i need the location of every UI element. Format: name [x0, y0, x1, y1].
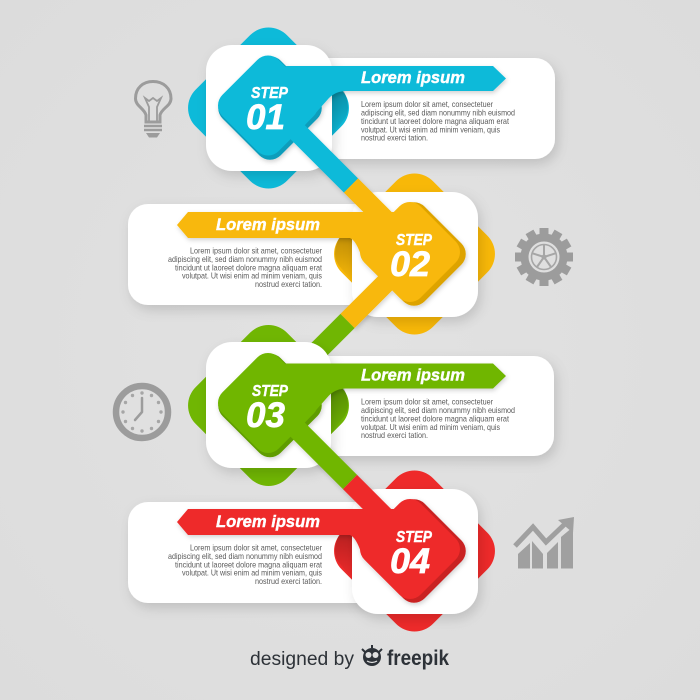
step 2 description: Lorem ipsum dolor sit amet, consectetuer	[190, 246, 322, 256]
step 1 title: Lorem ipsum	[361, 68, 465, 87]
step 2 description: adipiscing elit, sed diam nonummy nibh euismod	[168, 255, 322, 264]
step 3 description: Lorem ipsum dolor sit amet, consectetuer	[361, 398, 493, 406]
step 1 marker: diamond, arrow band and connector	[212, 49, 506, 186]
connector: green segment behind step 3	[298, 321, 348, 370]
footer credit	[250, 645, 449, 670]
step 2 title: Lorem ipsum	[216, 215, 320, 234]
icon: gear with wheel	[515, 228, 573, 286]
step 3 marker: diamond, arrow band and connector	[212, 347, 506, 482]
step 4 description: tincidunt ut laoreet dolore magna aliquam erat	[175, 560, 323, 569]
step 3 description: nostrud exerci tation.	[361, 431, 428, 440]
step 3 base: panel and plates	[177, 314, 554, 497]
step 4 base: panel and plates	[128, 460, 506, 642]
step 1 description: adipiscing elit, sed diam nonummy nibh euismod	[361, 108, 515, 117]
step 3 description: tincidunt ut laoreet dolore magna aliquam erat	[361, 414, 510, 423]
step 2 base: panel and plates	[128, 163, 506, 345]
step 1 base: panel and plates	[177, 17, 555, 199]
step 1 description: tincidunt ut laoreet dolore magna aliquam erat	[361, 117, 510, 126]
step 1 description: Lorem ipsum dolor sit amet, consectetuer	[361, 100, 493, 109]
step 1 description: nostrud exerci tation.	[361, 134, 428, 143]
step 4 description: adipiscing elit, sed diam nonummy nibh euismod	[168, 552, 322, 561]
step 4 description: Lorem ipsum dolor sit amet, consectetuer	[190, 544, 322, 552]
step 1 number: 01	[246, 98, 285, 137]
step 4 title: Lorem ipsum	[216, 512, 320, 531]
step 1 description	[361, 100, 515, 143]
step 2 label: STEP	[396, 232, 432, 249]
step 3 number: 03	[246, 396, 286, 435]
step 2 marker: diamond, arrow band and connectors	[177, 186, 472, 321]
icon: growth chart	[515, 517, 574, 568]
step 4 description: volutpat. Ut wisi enim ad minim veniam, quis	[182, 569, 322, 578]
step 4 label: STEP	[396, 529, 432, 546]
step 2 description	[168, 246, 323, 289]
step 2 description: tincidunt ut laoreet dolore magna aliquam erat	[175, 263, 323, 272]
step 2 description: nostrud exerci tation.	[255, 280, 322, 289]
footer credit: freepik	[387, 647, 449, 670]
footer credit: designed by	[250, 649, 355, 670]
step 1 label: STEP	[251, 85, 288, 102]
step 4 description: nostrud exerci tation.	[255, 577, 322, 586]
icon: clock	[116, 386, 168, 438]
step 4 description	[168, 544, 323, 586]
step 3 description: adipiscing elit, sed diam nonummy nibh euismod	[361, 406, 515, 415]
step 4 number: 04	[390, 542, 430, 581]
step 4 marker: diamond, arrow band and connector	[177, 482, 472, 609]
step 2 description: volutpat. Ut wisi enim ad minim veniam, quis	[182, 272, 322, 281]
step 3 description	[361, 398, 515, 440]
step 2 number: 02	[390, 245, 431, 284]
icon: light bulb	[136, 82, 171, 138]
step 3 label: STEP	[252, 383, 288, 400]
step 3 title: Lorem ipsum	[361, 366, 465, 384]
step 3 description: volutpat. Ut wisi enim ad minim veniam, quis	[361, 423, 500, 432]
step 1 description: volutpat. Ut wisi enim ad minim veniam, quis	[361, 125, 500, 134]
